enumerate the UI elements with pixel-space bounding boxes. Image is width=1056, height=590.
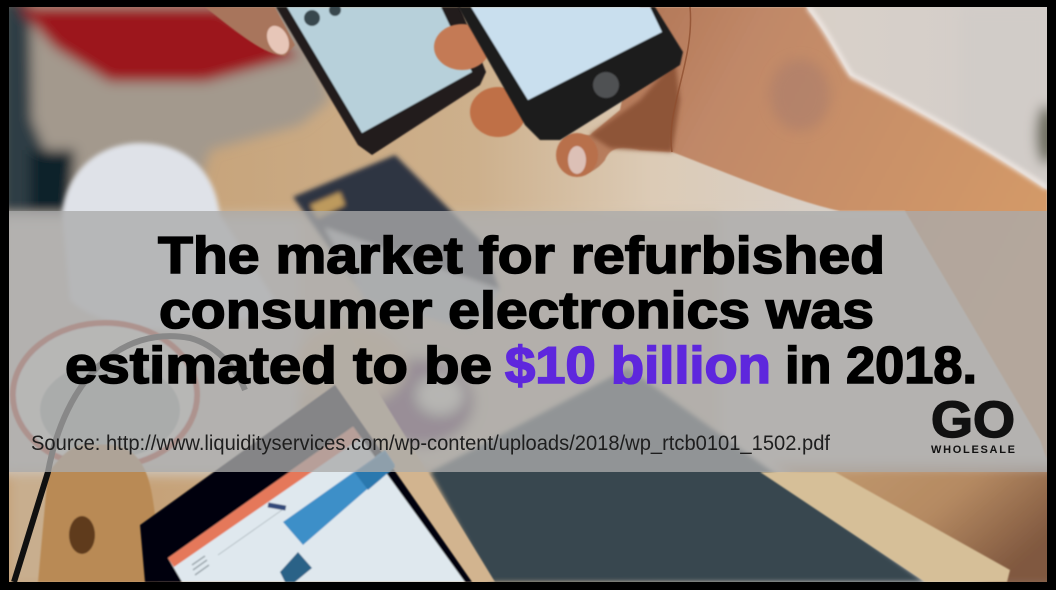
forearm and hand holding phone [558, 7, 1047, 460]
bowl with red rim [13, 323, 197, 467]
logo: GO Wholesale [931, 391, 1015, 456]
source citation: Source: http://www.liquidityservices.com/wp-content/uploads/2018/wp_rtcb0101_1502.pdf [31, 431, 830, 455]
wooden tablet stand [38, 372, 496, 582]
white light on wrist edge [808, 7, 1047, 188]
crease line in palm [671, 7, 691, 152]
finger at top left [205, 7, 598, 177]
left smartphone [276, 4, 486, 155]
headline line 2: consumer electronics was [159, 282, 874, 340]
headline line 3 end: in 2018. [785, 337, 977, 395]
black cable [14, 336, 245, 582]
headline [65, 227, 977, 395]
shadowed hand area under phone [590, 60, 680, 152]
translucent text band [9, 211, 1047, 472]
logo tagline: WHOLESALE [931, 444, 1015, 456]
wooden edge strip [760, 472, 1010, 582]
right smartphone [458, 7, 683, 140]
headline line 3 start: estimated to be [65, 337, 492, 395]
foreground tablet [140, 385, 472, 582]
blurred card terminal on table [290, 152, 500, 292]
palm shadow [770, 59, 830, 131]
dark slate tablet at lower right [430, 368, 925, 582]
headline line 1: The market for refurbished [158, 227, 885, 285]
fingers between the phones [434, 24, 526, 137]
highlighted figure: $10 billion [505, 337, 771, 395]
white coffee cup [62, 143, 275, 330]
logo wordmark: GO [931, 391, 1015, 448]
